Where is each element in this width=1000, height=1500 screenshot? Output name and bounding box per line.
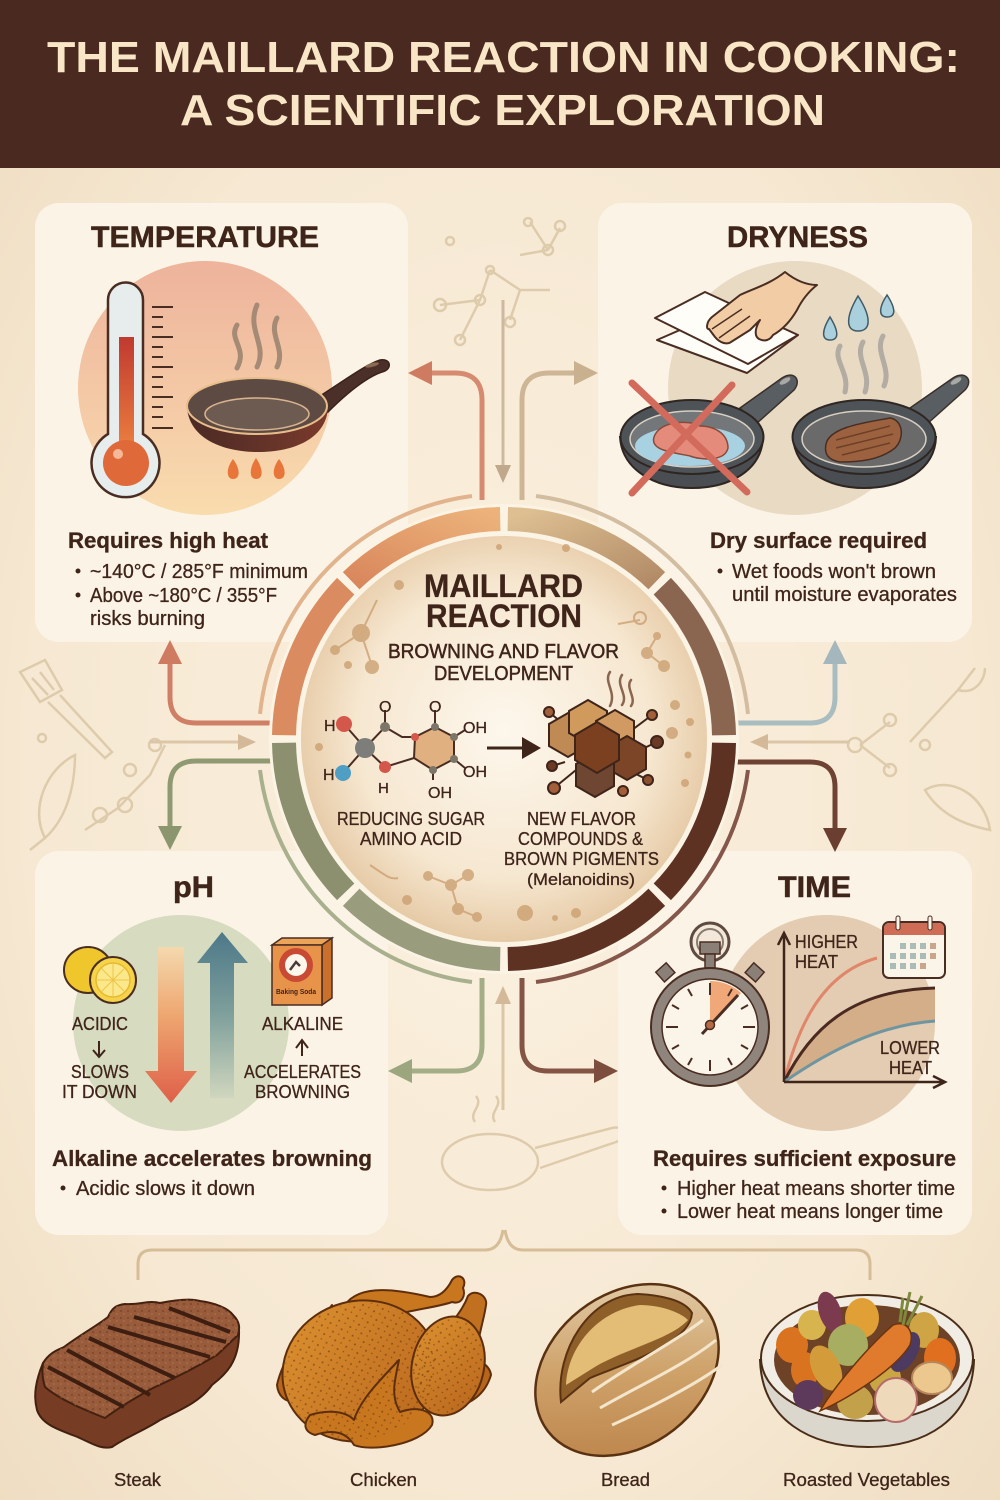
icon: red cross (632, 383, 747, 493)
icon background circle (719, 915, 935, 1131)
arrow: to temperature (top) (408, 361, 482, 500)
label: roasted vegetables: Roasted Vegetables (783, 1470, 950, 1490)
arrow: to pH (bottom) (388, 978, 482, 1083)
panel: temperature (35, 203, 408, 642)
chart: browning curves: HIGHER (795, 932, 858, 952)
icon: paper towel (655, 292, 798, 373)
arrow: reaction (487, 737, 541, 759)
subtitle: browning and flavor: DEVELOPMENT (434, 663, 573, 685)
molecule: reactants: H (324, 718, 336, 735)
text block: pH (52, 1146, 372, 1200)
icon: steam (235, 305, 280, 368)
label: steak: Steak (114, 1470, 162, 1490)
arrow: to time (bottom) (522, 978, 618, 1083)
heading: dryness: DRYNESS (727, 221, 868, 254)
labels: acidic: SLOWS (71, 1062, 129, 1082)
ring segments (284, 519, 724, 959)
food: bread (501, 1249, 753, 1491)
labels: acidic: IT DOWN (62, 1082, 137, 1102)
text block: temperature (68, 528, 308, 630)
icon background circle (73, 915, 289, 1131)
label: reactants: AMINO ACID (360, 829, 462, 849)
icon: calendar (883, 916, 945, 978)
icon background circle (78, 261, 332, 515)
molecule: reactants: H (323, 767, 335, 784)
bracket connecting to foods (138, 1230, 870, 1280)
title: THE MAILLARD REACTION IN COOKING: (47, 33, 960, 82)
faint molecule decorations (316, 545, 693, 921)
inner disc (301, 536, 707, 942)
icon: flames (228, 458, 285, 479)
panel: time (618, 851, 972, 1235)
arrow: to dryness (side) (736, 640, 847, 723)
molecule: reactants: O (379, 699, 391, 716)
panel: pH (35, 851, 388, 1235)
arrow: centre inflow from top (495, 300, 511, 483)
heading: temperature: TEMPERATURE (91, 221, 319, 254)
labels: alkaline: ACCELERATES (244, 1062, 361, 1082)
icon: thermometer (92, 282, 173, 497)
molecule: reactants: O (429, 699, 441, 716)
label: products: (Melanoidins) (527, 870, 635, 889)
arrow: centre inflow from bottom (495, 986, 511, 1110)
text block: dryness: until moisture evaporates (732, 584, 957, 606)
text block: temperature: Requires high heat (68, 528, 269, 553)
icon: water drops (824, 295, 894, 340)
label: products: NEW FLAVOR (527, 809, 636, 829)
chart: browning curves (778, 932, 945, 1088)
labels: alkaline: BROWNING (255, 1082, 350, 1102)
chart: browning curves: LOWER (880, 1038, 940, 1058)
label: bread: Bread (601, 1470, 650, 1490)
panel: dryness (598, 203, 972, 642)
icon: wet pan crossed (620, 375, 797, 493)
labels: acidic: ACIDIC (72, 1014, 128, 1034)
heading: pH: pH (173, 871, 214, 904)
central reaction circle (260, 496, 748, 982)
text block: time: Lower heat means longer time (677, 1201, 943, 1223)
arrow: centre inflow from right (750, 734, 850, 750)
icon: lemon (64, 947, 136, 1003)
molecule: reactants: OH (463, 720, 487, 737)
icon: frying pan (187, 360, 389, 452)
icon: hand (707, 272, 817, 343)
molecule: melanoidin products (544, 700, 663, 797)
icon: baking soda box: Baking Soda (276, 989, 316, 996)
text block: temperature: Above ~180°C / 355°F (90, 585, 277, 607)
ring base (269, 504, 739, 974)
icon: steam (838, 336, 886, 392)
text block: dryness: Dry surface required (710, 528, 927, 553)
arrow: acidic down (145, 947, 197, 1103)
label: reactants: REDUCING SUGAR (337, 809, 485, 829)
food: steak (35, 1300, 239, 1490)
food: chicken (267, 1276, 494, 1490)
chart: browning curves: HEAT (795, 952, 838, 972)
chart: browning curves: HEAT (889, 1058, 932, 1078)
arrow: to dryness (top) (522, 361, 598, 500)
text block: time: Requires sufficient exposure (653, 1146, 956, 1171)
outer thin arcs (260, 496, 748, 982)
labels: acidic (62, 1014, 137, 1102)
molecule: reactants: OH (463, 764, 487, 781)
text block: pH: Acidic slows it down (76, 1178, 255, 1200)
icon: dry pan with steak (792, 375, 969, 488)
text block: temperature: ~140°C / 285°F minimum (90, 561, 308, 583)
labels: alkaline (244, 1014, 361, 1102)
text block: dryness (710, 528, 957, 606)
icon: aroma steam (608, 672, 633, 706)
food: roasted vegetables (760, 1289, 974, 1490)
subtitle: browning and flavor (388, 641, 619, 685)
arrow: centre inflow from left (150, 734, 256, 750)
arrow: to time (side) (734, 762, 847, 852)
icon: baking soda box (272, 938, 332, 1005)
molecule: reactants: H (378, 780, 389, 797)
label: chicken: Chicken (350, 1470, 417, 1490)
arrow: to temperature (side) (158, 640, 275, 723)
label: reactants (337, 809, 485, 849)
icon: stopwatch (651, 923, 769, 1086)
title (47, 33, 960, 135)
label: products: COMPOUNDS & (518, 829, 643, 849)
labels: alkaline: ALKALINE (262, 1014, 343, 1034)
text block: time: Higher heat means shorter time (677, 1178, 955, 1200)
heading: maillard reaction (424, 568, 583, 634)
label: products (504, 809, 659, 889)
heading: maillard reaction: MAILLARD (424, 568, 583, 604)
text block: pH: Alkaline accelerates browning (52, 1146, 372, 1171)
title: A SCIENTIFIC EXPLORATION (180, 86, 825, 135)
label: products: BROWN PIGMENTS (504, 849, 659, 869)
arrow: to pH (side) (158, 761, 272, 850)
text block: dryness: Wet foods won't brown (732, 561, 936, 583)
arrow: alkaline up (197, 932, 248, 1098)
molecule: reactants: OH (428, 785, 452, 802)
text block: time (653, 1146, 956, 1223)
header banner (0, 0, 1000, 168)
icon background circle (668, 261, 922, 515)
text block: temperature: risks burning (90, 608, 205, 630)
heading: maillard reaction: REACTION (426, 598, 582, 634)
heading: time: TIME (778, 871, 851, 904)
molecule: reactants (323, 699, 487, 802)
decorative background sketches (20, 218, 990, 1190)
subtitle: browning and flavor: BROWNING AND FLAVOR (388, 641, 619, 663)
